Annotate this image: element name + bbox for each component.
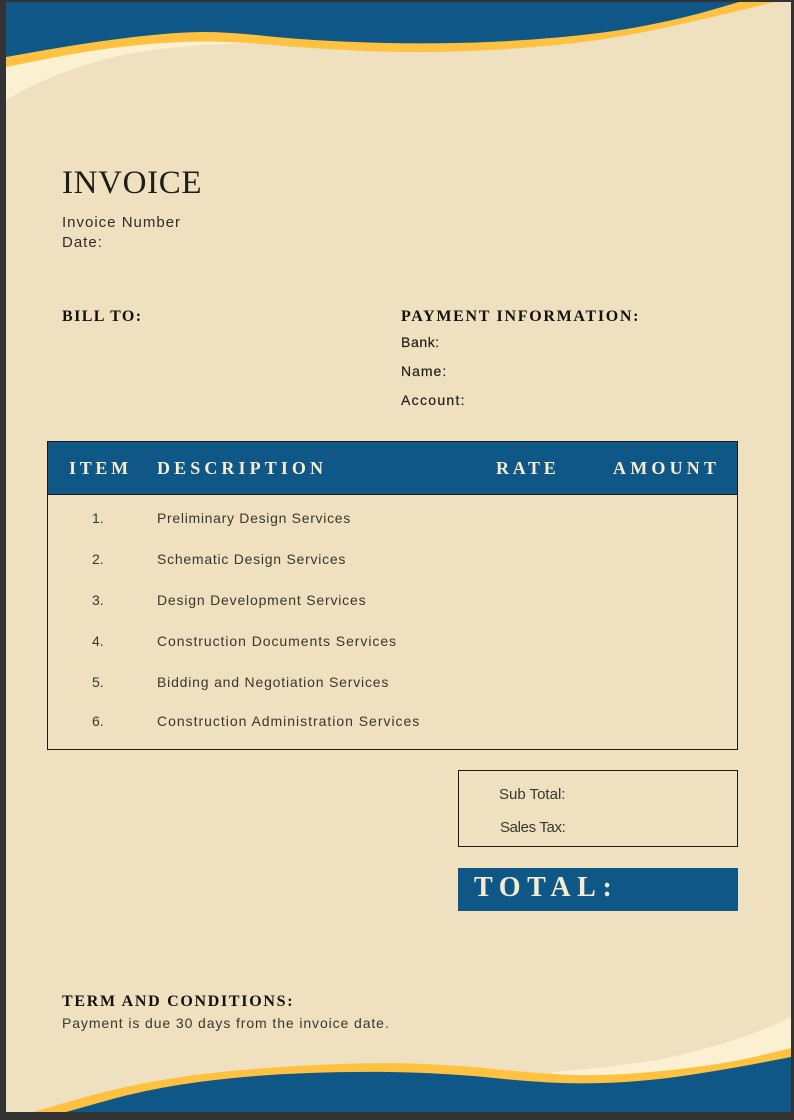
text: Construction Documents Services xyxy=(157,633,397,649)
payment heading: PAYMENT INFORMATION: xyxy=(401,308,640,325)
title: INVOICE xyxy=(62,165,202,201)
text: Bidding and Negotiation Services xyxy=(157,674,389,690)
terms text: Payment is due 30 days from the invoice date. xyxy=(62,1015,390,1031)
text: Preliminary Design Services xyxy=(157,510,351,526)
row 1: 1. xyxy=(92,510,104,526)
header: item: ITEM xyxy=(69,458,132,478)
invoice meta xyxy=(62,214,181,251)
text: Design Development Services xyxy=(157,592,366,608)
invoice meta: Date: xyxy=(62,234,103,251)
text: Schematic Design Services xyxy=(157,551,346,567)
invoice meta: Invoice Number xyxy=(62,214,181,231)
row 5: 5. xyxy=(92,674,104,690)
sub total label: Sub Total: xyxy=(499,786,565,803)
total bar xyxy=(458,868,738,911)
payment information xyxy=(400,308,640,408)
text: Construction Administration Services xyxy=(157,713,420,729)
row 6: 6. xyxy=(92,713,104,729)
row 3: 3. xyxy=(92,592,104,608)
row 4: 4. xyxy=(92,633,104,649)
subtotal box xyxy=(458,770,738,847)
table header xyxy=(48,442,737,495)
row 1 xyxy=(92,510,351,526)
terms heading: TERM AND CONDITIONS: xyxy=(62,993,294,1010)
row 2 xyxy=(92,551,346,567)
header: amount: AMOUNT xyxy=(613,458,720,478)
top wave decoration xyxy=(6,2,775,100)
row 4 xyxy=(92,633,397,649)
bottom wave decoration xyxy=(33,1017,791,1112)
total label: TOTAL: xyxy=(474,872,618,903)
account label: Account: xyxy=(401,392,466,408)
sales tax label: Sales Tax: xyxy=(500,819,565,836)
items table xyxy=(47,441,738,750)
row 5 xyxy=(92,674,389,690)
name label: Name: xyxy=(401,363,447,379)
bill to heading: BILL TO: xyxy=(62,308,142,325)
header: description: DESCRIPTION xyxy=(157,458,327,478)
row 3 xyxy=(92,592,366,608)
row 6 xyxy=(92,713,420,729)
header: rate: RATE xyxy=(496,458,559,478)
row 2: 2. xyxy=(92,551,104,567)
bank label: Bank: xyxy=(401,334,440,350)
